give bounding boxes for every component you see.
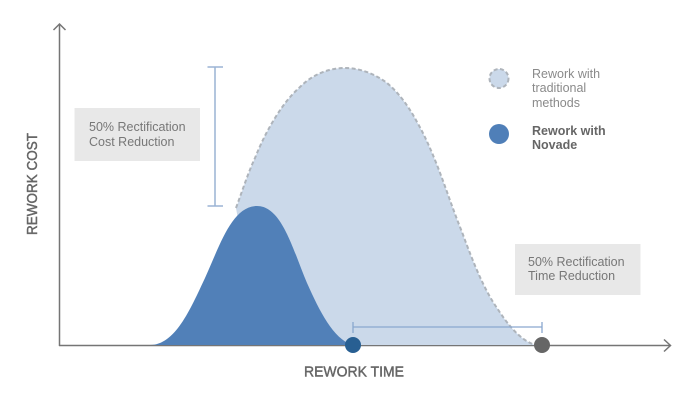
y axis label: REWORK COST	[24, 133, 41, 235]
callout: cost reduction: Cost Reduction	[89, 135, 175, 149]
x axis label: REWORK TIME	[304, 364, 404, 380]
legend: Novade	[489, 124, 606, 152]
marker: Novade end point	[345, 337, 361, 353]
legend: Novade: Novade	[532, 138, 577, 152]
area: rework with Novade	[150, 206, 352, 345]
legend: Novade: Rework with	[532, 124, 606, 138]
callout: time reduction: 50% Rectification	[528, 255, 625, 269]
callout: cost reduction	[74, 108, 200, 161]
callout: time reduction: Time Reduction	[528, 269, 615, 283]
y axis arrow	[54, 24, 66, 346]
cost reduction bracket	[208, 67, 223, 206]
area: rework with traditional methods	[236, 68, 535, 345]
legend: traditional methods: traditional	[532, 81, 586, 95]
callout: cost reduction: 50% Rectification	[89, 120, 186, 134]
marker: traditional end point	[534, 337, 550, 353]
time reduction bracket	[353, 322, 542, 333]
legend: traditional methods: Rework with	[532, 67, 600, 81]
x axis arrow	[59, 340, 670, 352]
callout: time reduction	[515, 244, 640, 295]
legend: traditional methods: methods	[532, 96, 580, 110]
legend: traditional methods	[490, 67, 600, 110]
